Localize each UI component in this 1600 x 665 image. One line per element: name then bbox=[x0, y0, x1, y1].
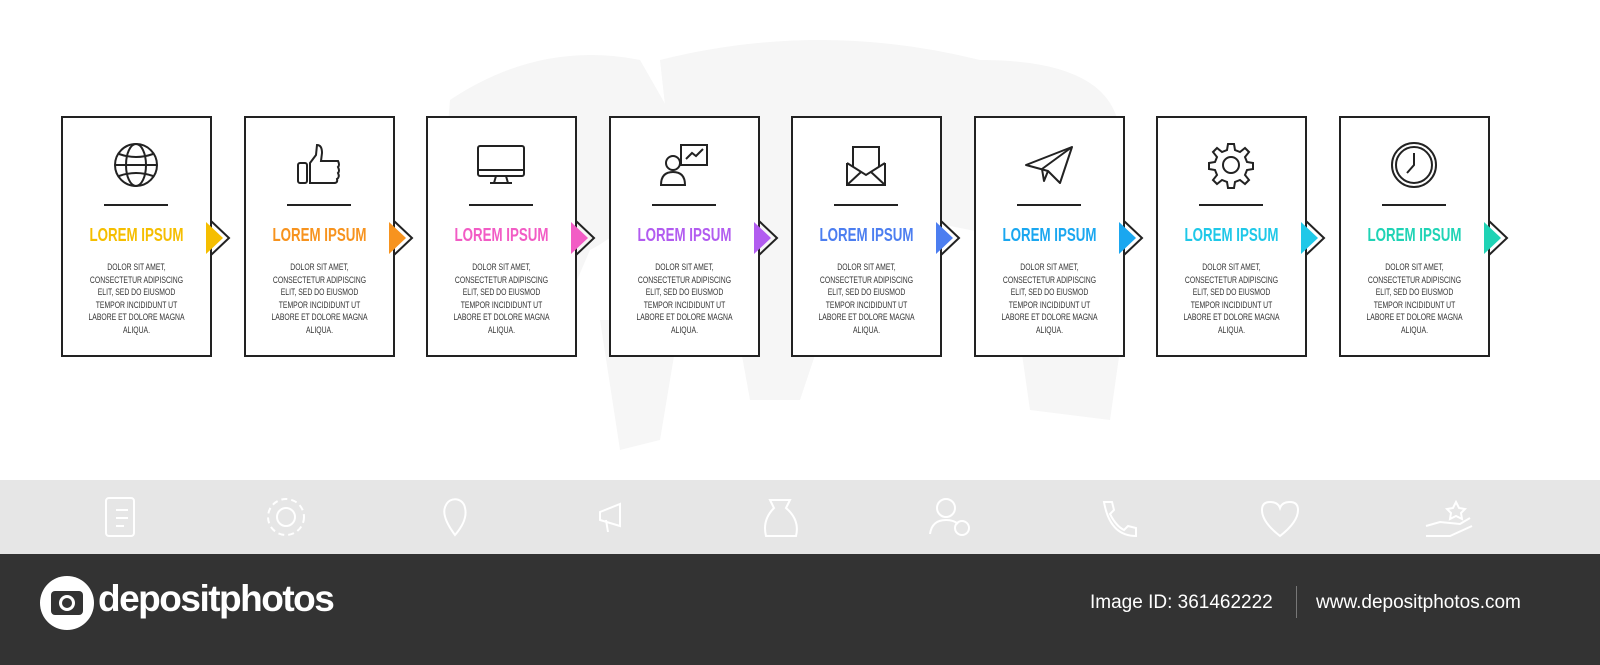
text 2 bbox=[271, 262, 368, 336]
text 5: ELIT, SED DO EIUSMOD bbox=[828, 287, 905, 298]
logo icon bbox=[40, 576, 94, 630]
text 8: CONSECTETUR ADIPISCING bbox=[1368, 275, 1461, 286]
text 1: CONSECTETUR ADIPISCING bbox=[90, 275, 183, 286]
text 5: LABORE ET DOLORE MAGNA bbox=[818, 312, 915, 323]
text 7: ELIT, SED DO EIUSMOD bbox=[1193, 287, 1270, 298]
text 6 bbox=[1001, 262, 1098, 336]
text 8: TEMPOR INCIDIDUNT UT bbox=[1374, 300, 1455, 311]
text 8: DOLOR SIT AMET, bbox=[1385, 262, 1444, 273]
card 7 bbox=[1156, 116, 1326, 357]
text 2: DOLOR SIT AMET, bbox=[290, 262, 349, 273]
text 7: TEMPOR INCIDIDUNT UT bbox=[1191, 300, 1272, 311]
arrow 8 bbox=[1484, 220, 1508, 256]
icon: paper plane bbox=[1025, 146, 1073, 184]
text 6: LABORE ET DOLORE MAGNA bbox=[1001, 312, 1098, 323]
text 4: LABORE ET DOLORE MAGNA bbox=[636, 312, 733, 323]
card 2 bbox=[244, 116, 414, 357]
text 8: ALIQUA. bbox=[1401, 325, 1428, 336]
card 6 bbox=[974, 116, 1144, 357]
text 2: CONSECTETUR ADIPISCING bbox=[273, 275, 366, 286]
icon: open envelope bbox=[846, 146, 886, 186]
title 5: LOREM IPSUM bbox=[819, 225, 913, 245]
icon: presenter chart bbox=[660, 144, 708, 186]
title 1: LOREM IPSUM bbox=[89, 225, 183, 245]
text 3: ELIT, SED DO EIUSMOD bbox=[463, 287, 540, 298]
title 4: LOREM IPSUM bbox=[637, 225, 731, 245]
text 1: ALIQUA. bbox=[123, 325, 150, 336]
text 7: LABORE ET DOLORE MAGNA bbox=[1183, 312, 1280, 323]
text 2: ALIQUA. bbox=[306, 325, 333, 336]
text 4: DOLOR SIT AMET, bbox=[655, 262, 714, 273]
arrow 6 bbox=[1119, 220, 1144, 256]
text 5: DOLOR SIT AMET, bbox=[837, 262, 896, 273]
text 5: CONSECTETUR ADIPISCING bbox=[820, 275, 913, 286]
text 4 bbox=[636, 262, 733, 336]
text 6: ALIQUA. bbox=[1036, 325, 1063, 336]
card 1 bbox=[61, 116, 230, 357]
text 6: ELIT, SED DO EIUSMOD bbox=[1011, 287, 1088, 298]
text 3: ALIQUA. bbox=[488, 325, 515, 336]
icon: monitor bbox=[477, 145, 525, 184]
image id: Image ID: 361462222 bbox=[1090, 592, 1273, 613]
text 3: CONSECTETUR ADIPISCING bbox=[455, 275, 548, 286]
text 3: TEMPOR INCIDIDUNT UT bbox=[461, 300, 542, 311]
icon: globe bbox=[114, 143, 158, 187]
text 4: ALIQUA. bbox=[671, 325, 698, 336]
icon: gear bbox=[1208, 143, 1254, 189]
text 2: TEMPOR INCIDIDUNT UT bbox=[279, 300, 360, 311]
text 8 bbox=[1366, 262, 1463, 336]
card 3 bbox=[426, 116, 596, 357]
arrow 5 bbox=[936, 220, 960, 256]
text 5: TEMPOR INCIDIDUNT UT bbox=[826, 300, 907, 311]
text 1: LABORE ET DOLORE MAGNA bbox=[88, 312, 185, 323]
text 5 bbox=[818, 262, 915, 336]
card 8 bbox=[1339, 116, 1508, 357]
text 3: DOLOR SIT AMET, bbox=[472, 262, 531, 273]
text 8: LABORE ET DOLORE MAGNA bbox=[1366, 312, 1463, 323]
arrow 3 bbox=[571, 220, 596, 256]
title 3: LOREM IPSUM bbox=[454, 225, 548, 245]
arrow 1 bbox=[206, 220, 230, 256]
text 3: LABORE ET DOLORE MAGNA bbox=[453, 312, 550, 323]
title 2: LOREM IPSUM bbox=[272, 225, 366, 245]
arrow 7 bbox=[1301, 220, 1326, 256]
background world map bbox=[449, 40, 1119, 450]
footer bbox=[0, 554, 1600, 665]
title 6: LOREM IPSUM bbox=[1002, 225, 1096, 245]
text 7: ALIQUA. bbox=[1218, 325, 1245, 336]
text 4: ELIT, SED DO EIUSMOD bbox=[646, 287, 723, 298]
text 7 bbox=[1183, 262, 1280, 336]
logo text: depositphotos bbox=[98, 578, 333, 619]
text 3 bbox=[453, 262, 550, 336]
arrow 2 bbox=[389, 220, 414, 256]
text 4: CONSECTETUR ADIPISCING bbox=[638, 275, 731, 286]
text 6: DOLOR SIT AMET, bbox=[1020, 262, 1079, 273]
title 7: LOREM IPSUM bbox=[1184, 225, 1278, 245]
card 5 bbox=[791, 116, 960, 357]
text 7: DOLOR SIT AMET, bbox=[1202, 262, 1261, 273]
title 8: LOREM IPSUM bbox=[1367, 225, 1461, 245]
gray icon band bbox=[0, 480, 1600, 554]
text 8: ELIT, SED DO EIUSMOD bbox=[1376, 287, 1453, 298]
text 1: ELIT, SED DO EIUSMOD bbox=[98, 287, 175, 298]
text 2: LABORE ET DOLORE MAGNA bbox=[271, 312, 368, 323]
text 6: TEMPOR INCIDIDUNT UT bbox=[1009, 300, 1090, 311]
text 4: TEMPOR INCIDIDUNT UT bbox=[644, 300, 725, 311]
text 1 bbox=[88, 262, 185, 336]
text 1: TEMPOR INCIDIDUNT UT bbox=[96, 300, 177, 311]
text 2: ELIT, SED DO EIUSMOD bbox=[281, 287, 358, 298]
arrow 4 bbox=[754, 220, 778, 256]
card 4 bbox=[609, 116, 778, 357]
icon: clock bbox=[1391, 142, 1437, 188]
text 7: CONSECTETUR ADIPISCING bbox=[1185, 275, 1278, 286]
icon: thumbs up bbox=[297, 144, 340, 184]
website: www.depositphotos.com bbox=[1316, 592, 1521, 613]
text 5: ALIQUA. bbox=[853, 325, 880, 336]
text 1: DOLOR SIT AMET, bbox=[107, 262, 166, 273]
text 6: CONSECTETUR ADIPISCING bbox=[1003, 275, 1096, 286]
